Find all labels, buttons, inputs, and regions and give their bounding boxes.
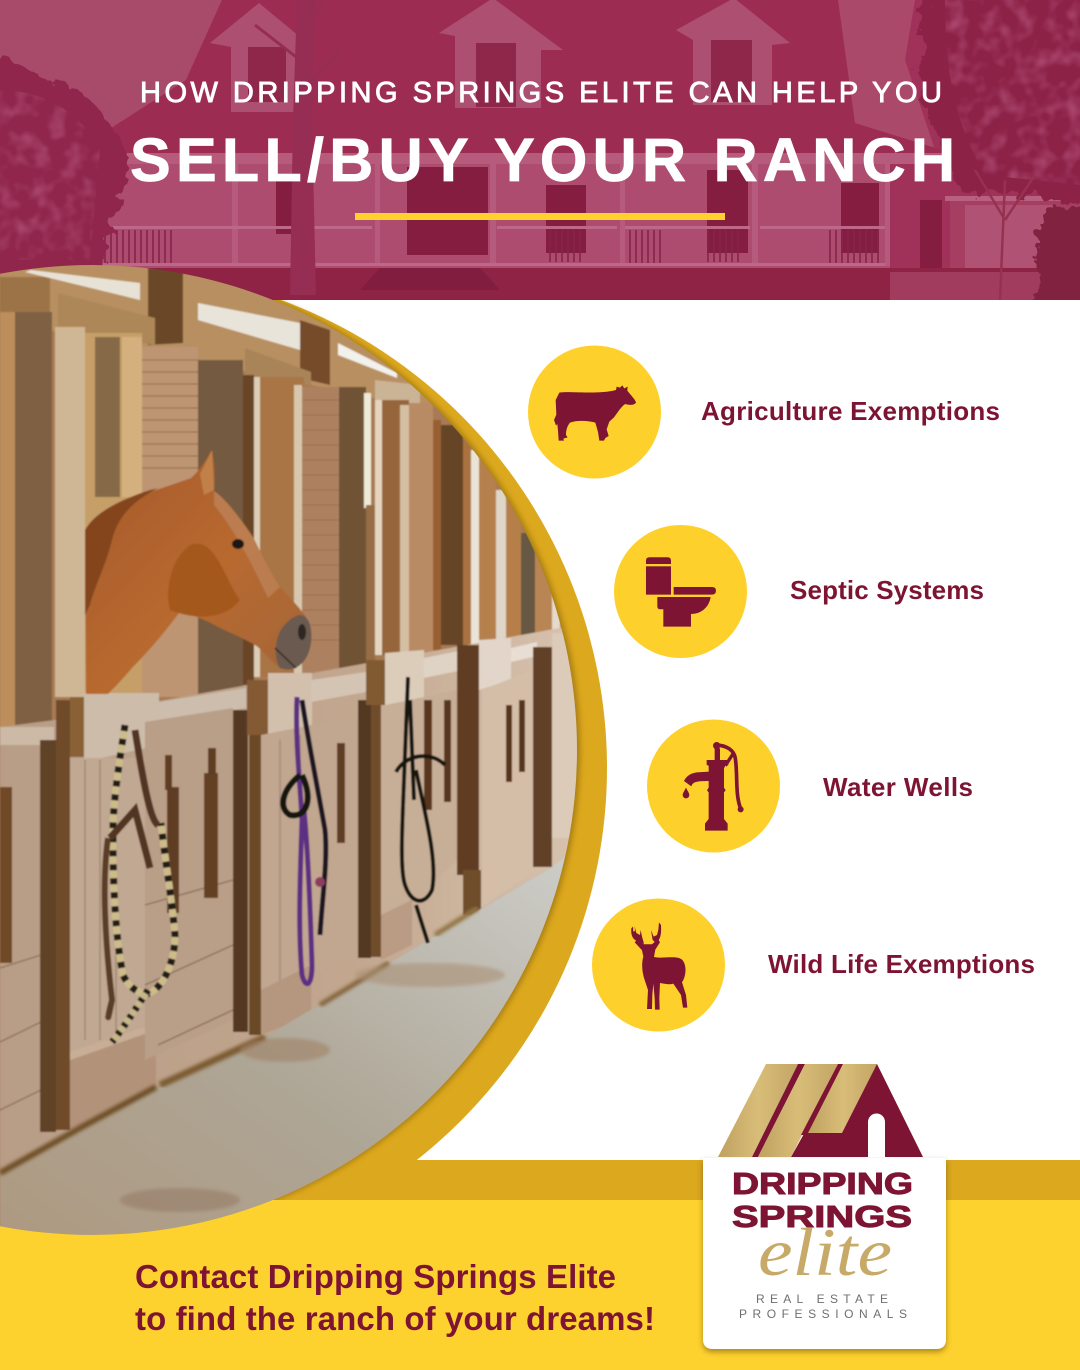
rail and plank wall	[159, 688, 246, 722]
second stall upper	[260, 377, 304, 677]
bottom band: dark gold stripe	[0, 1160, 1080, 1200]
first door	[84, 693, 159, 762]
house roof	[69, 0, 958, 155]
logo card	[703, 1064, 946, 1349]
logo card: REAL ESTATE	[756, 1292, 888, 1306]
icon: deer in yellow circle	[592, 898, 725, 1032]
slatted window	[142, 347, 198, 697]
tree foliage mottling	[0, 0, 1080, 260]
icon: water pump in yellow circle	[647, 720, 780, 852]
left posts	[0, 312, 16, 732]
logo roof	[718, 1064, 923, 1157]
logo card: PROFESSIONALS	[739, 1307, 907, 1321]
left panel details	[0, 727, 54, 745]
third door	[358, 700, 371, 958]
call to action text: to find the ranch of your dreams!	[135, 1300, 655, 1337]
icon: toilet in yellow circle	[614, 525, 747, 658]
fourth door	[457, 645, 479, 875]
gold crescent behind photo	[273, 300, 607, 1160]
second door	[233, 710, 248, 1032]
top boards	[0, 262, 430, 410]
door and windows	[276, 167, 942, 270]
label: agriculture exemptions: Agriculture Exemptions	[701, 396, 1000, 426]
heading underline	[355, 213, 725, 220]
logo card: elite	[758, 1214, 892, 1290]
photo: horse in barn stalls, circular crop	[0, 260, 600, 1260]
heading: small title: HOW DRIPPING SPRINGS ELITE CAN HELP YOU	[140, 77, 942, 109]
walls	[90, 163, 890, 269]
label: septic systems: Septic Systems	[790, 575, 984, 605]
porch posts	[232, 164, 890, 266]
halter and rope, third stall	[396, 677, 445, 943]
trees	[0, 0, 1080, 310]
call to action text: Contact Dripping Springs Elite	[135, 1258, 616, 1295]
logo card: SPRINGS	[732, 1199, 912, 1234]
icon: cow in yellow circle	[528, 346, 661, 478]
third stall upper	[382, 399, 410, 656]
logo wordmark: DRIPPING	[732, 1166, 913, 1201]
dormers	[210, 0, 790, 112]
label: water wells: Water Wells	[823, 772, 973, 802]
ground and steps	[146, 268, 1038, 300]
call to action text	[135, 1258, 655, 1337]
heading: main title: SELL/BUY YOUR RANCH	[130, 126, 955, 194]
bottom band: yellow	[0, 1200, 1080, 1370]
halter and rope, first stall	[105, 725, 175, 1042]
porch railing	[95, 226, 885, 266]
lower stall wall base	[0, 625, 590, 1173]
light gap right of the roof	[838, 0, 934, 148]
header panel: tinted house photo	[0, 0, 1080, 310]
far door	[533, 647, 552, 867]
horse	[85, 450, 311, 694]
halter and rope, second stall	[283, 697, 326, 984]
label: wild life exemptions: Wild Life Exemptions	[768, 949, 1035, 979]
floor	[0, 856, 565, 1235]
photo shadow on gold	[273, 300, 583, 1200]
